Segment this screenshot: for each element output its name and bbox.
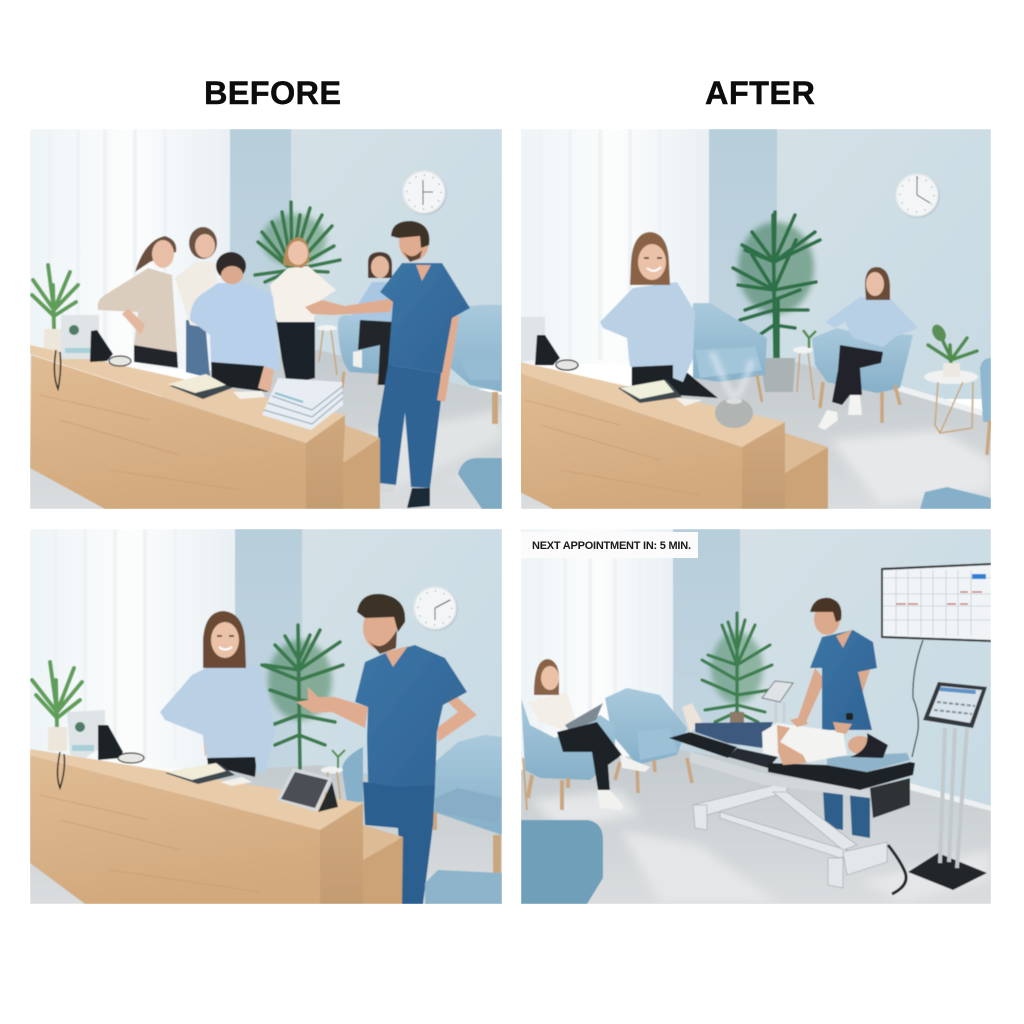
- man in blue scrubs gesturing: [296, 594, 477, 904]
- lower desk side: [785, 447, 828, 509]
- paper: [220, 777, 252, 786]
- desk side: [742, 422, 785, 509]
- side table: [317, 325, 337, 375]
- right waiting chair: [447, 305, 502, 424]
- curtain: [30, 129, 230, 369]
- notebook: [168, 374, 232, 399]
- table mechanism: [870, 778, 910, 818]
- small side table with plant: [793, 330, 816, 400]
- telephone: [54, 330, 131, 389]
- paper stack: [262, 378, 343, 430]
- desk top: [520, 362, 785, 447]
- floor: [30, 765, 502, 904]
- panel: after, treatment room: [517, 529, 991, 904]
- floor light: [830, 430, 991, 505]
- title: BEFORE: BEFORE: [204, 75, 341, 111]
- desk front: [30, 355, 306, 509]
- reception desk: [30, 345, 380, 509]
- underframe: [690, 752, 870, 798]
- black pad head: [768, 762, 915, 790]
- paper: [675, 398, 703, 406]
- woman in blue shirt: [160, 611, 275, 777]
- desk side: [306, 415, 345, 509]
- notebook: [165, 763, 235, 784]
- empty chair: [693, 303, 767, 402]
- potted plant: [702, 613, 772, 724]
- standing woman in blue shirt: [600, 232, 718, 398]
- panel: before, one to one at desk: [30, 529, 502, 904]
- black pad middle: [728, 748, 778, 768]
- blue cushion: [827, 753, 910, 772]
- back wall: [291, 129, 502, 389]
- treatment table: [669, 732, 915, 888]
- next appointment label: [521, 532, 698, 558]
- monitor cable: [912, 640, 923, 757]
- panel: before, crowded reception desk: [30, 129, 502, 509]
- curtain: [521, 129, 709, 364]
- lower desk top: [785, 433, 828, 473]
- back wall: [777, 129, 991, 399]
- tablet on stand: [277, 768, 338, 812]
- side wall: [230, 129, 291, 359]
- floor: [30, 350, 502, 509]
- tall plant: [262, 625, 343, 768]
- black pad foot: [669, 732, 737, 758]
- back wall: [302, 529, 502, 789]
- back wall: [740, 529, 991, 819]
- small plant: [32, 662, 82, 751]
- woman in beige shirt: [98, 236, 178, 368]
- title: AFTER: AFTER: [705, 75, 815, 111]
- small side table: [517, 751, 535, 810]
- woman reading in chair: [521, 659, 650, 810]
- picture frame: [61, 315, 99, 359]
- paper: [233, 391, 265, 399]
- side wall: [235, 529, 302, 769]
- side wall: [709, 129, 777, 369]
- next appointment label: NEXT APPOINTMENT IN: 5 MIN.: [532, 540, 691, 552]
- edge chair: [980, 358, 991, 455]
- lower desk top: [343, 425, 380, 463]
- foot pedal and cable: [888, 845, 906, 894]
- desk side: [320, 803, 363, 904]
- wall clock: [896, 174, 940, 218]
- wall clock: [403, 171, 447, 215]
- woman in blouse, back: [175, 226, 218, 376]
- small tablet on arm: [762, 681, 793, 722]
- woman with blond hair: [270, 237, 336, 385]
- corner chair: [458, 458, 502, 509]
- notebook: [618, 380, 682, 403]
- aroma diffuser with mist: [712, 352, 753, 428]
- desk front: [520, 373, 742, 509]
- seated woman in chair: [812, 267, 918, 430]
- seated woman in chair: [338, 252, 395, 388]
- side wall: [673, 529, 740, 769]
- bottom chair: [425, 870, 502, 904]
- baseboard: [898, 385, 982, 416]
- lower desk side: [343, 438, 380, 509]
- tall plant: [733, 212, 820, 392]
- curtain: [30, 529, 235, 769]
- woman in blue shirt leaning: [190, 252, 280, 392]
- right chair: [433, 735, 502, 873]
- small plant: [32, 265, 78, 352]
- back plant: [255, 202, 340, 282]
- bottom chair: [920, 487, 991, 509]
- floor light: [530, 790, 991, 904]
- hands on patient: [790, 716, 852, 734]
- floor: [521, 750, 991, 904]
- small table with plant: [924, 322, 978, 433]
- baseboard: [910, 783, 991, 811]
- bottom left chair: [521, 820, 603, 904]
- side table: [321, 750, 345, 805]
- waiting chair, empty: [605, 688, 692, 793]
- therapist in blue scrubs: [798, 598, 877, 838]
- picture frame: [67, 710, 105, 758]
- table base: [693, 782, 887, 888]
- reception desk: [520, 362, 828, 509]
- wall clock: [414, 587, 458, 631]
- panel: after, calm reception desk: [520, 129, 991, 509]
- patient lying down: [682, 703, 888, 765]
- lower desk side: [363, 837, 403, 904]
- wall monitor calendar: [881, 563, 991, 642]
- floor: [521, 362, 991, 509]
- telephone: [58, 725, 144, 788]
- kiosk stand: [908, 682, 987, 890]
- reception desk: [30, 749, 403, 904]
- back chair: [342, 747, 363, 802]
- man in blue scrubs gesturing: [305, 221, 470, 508]
- curtain: [521, 529, 673, 764]
- picture frame: [520, 317, 545, 362]
- telephone: [535, 335, 578, 370]
- floor light: [374, 411, 502, 482]
- lower desk top: [363, 825, 403, 860]
- desk front: [30, 755, 320, 904]
- desk top: [30, 345, 345, 443]
- desk top: [30, 749, 363, 830]
